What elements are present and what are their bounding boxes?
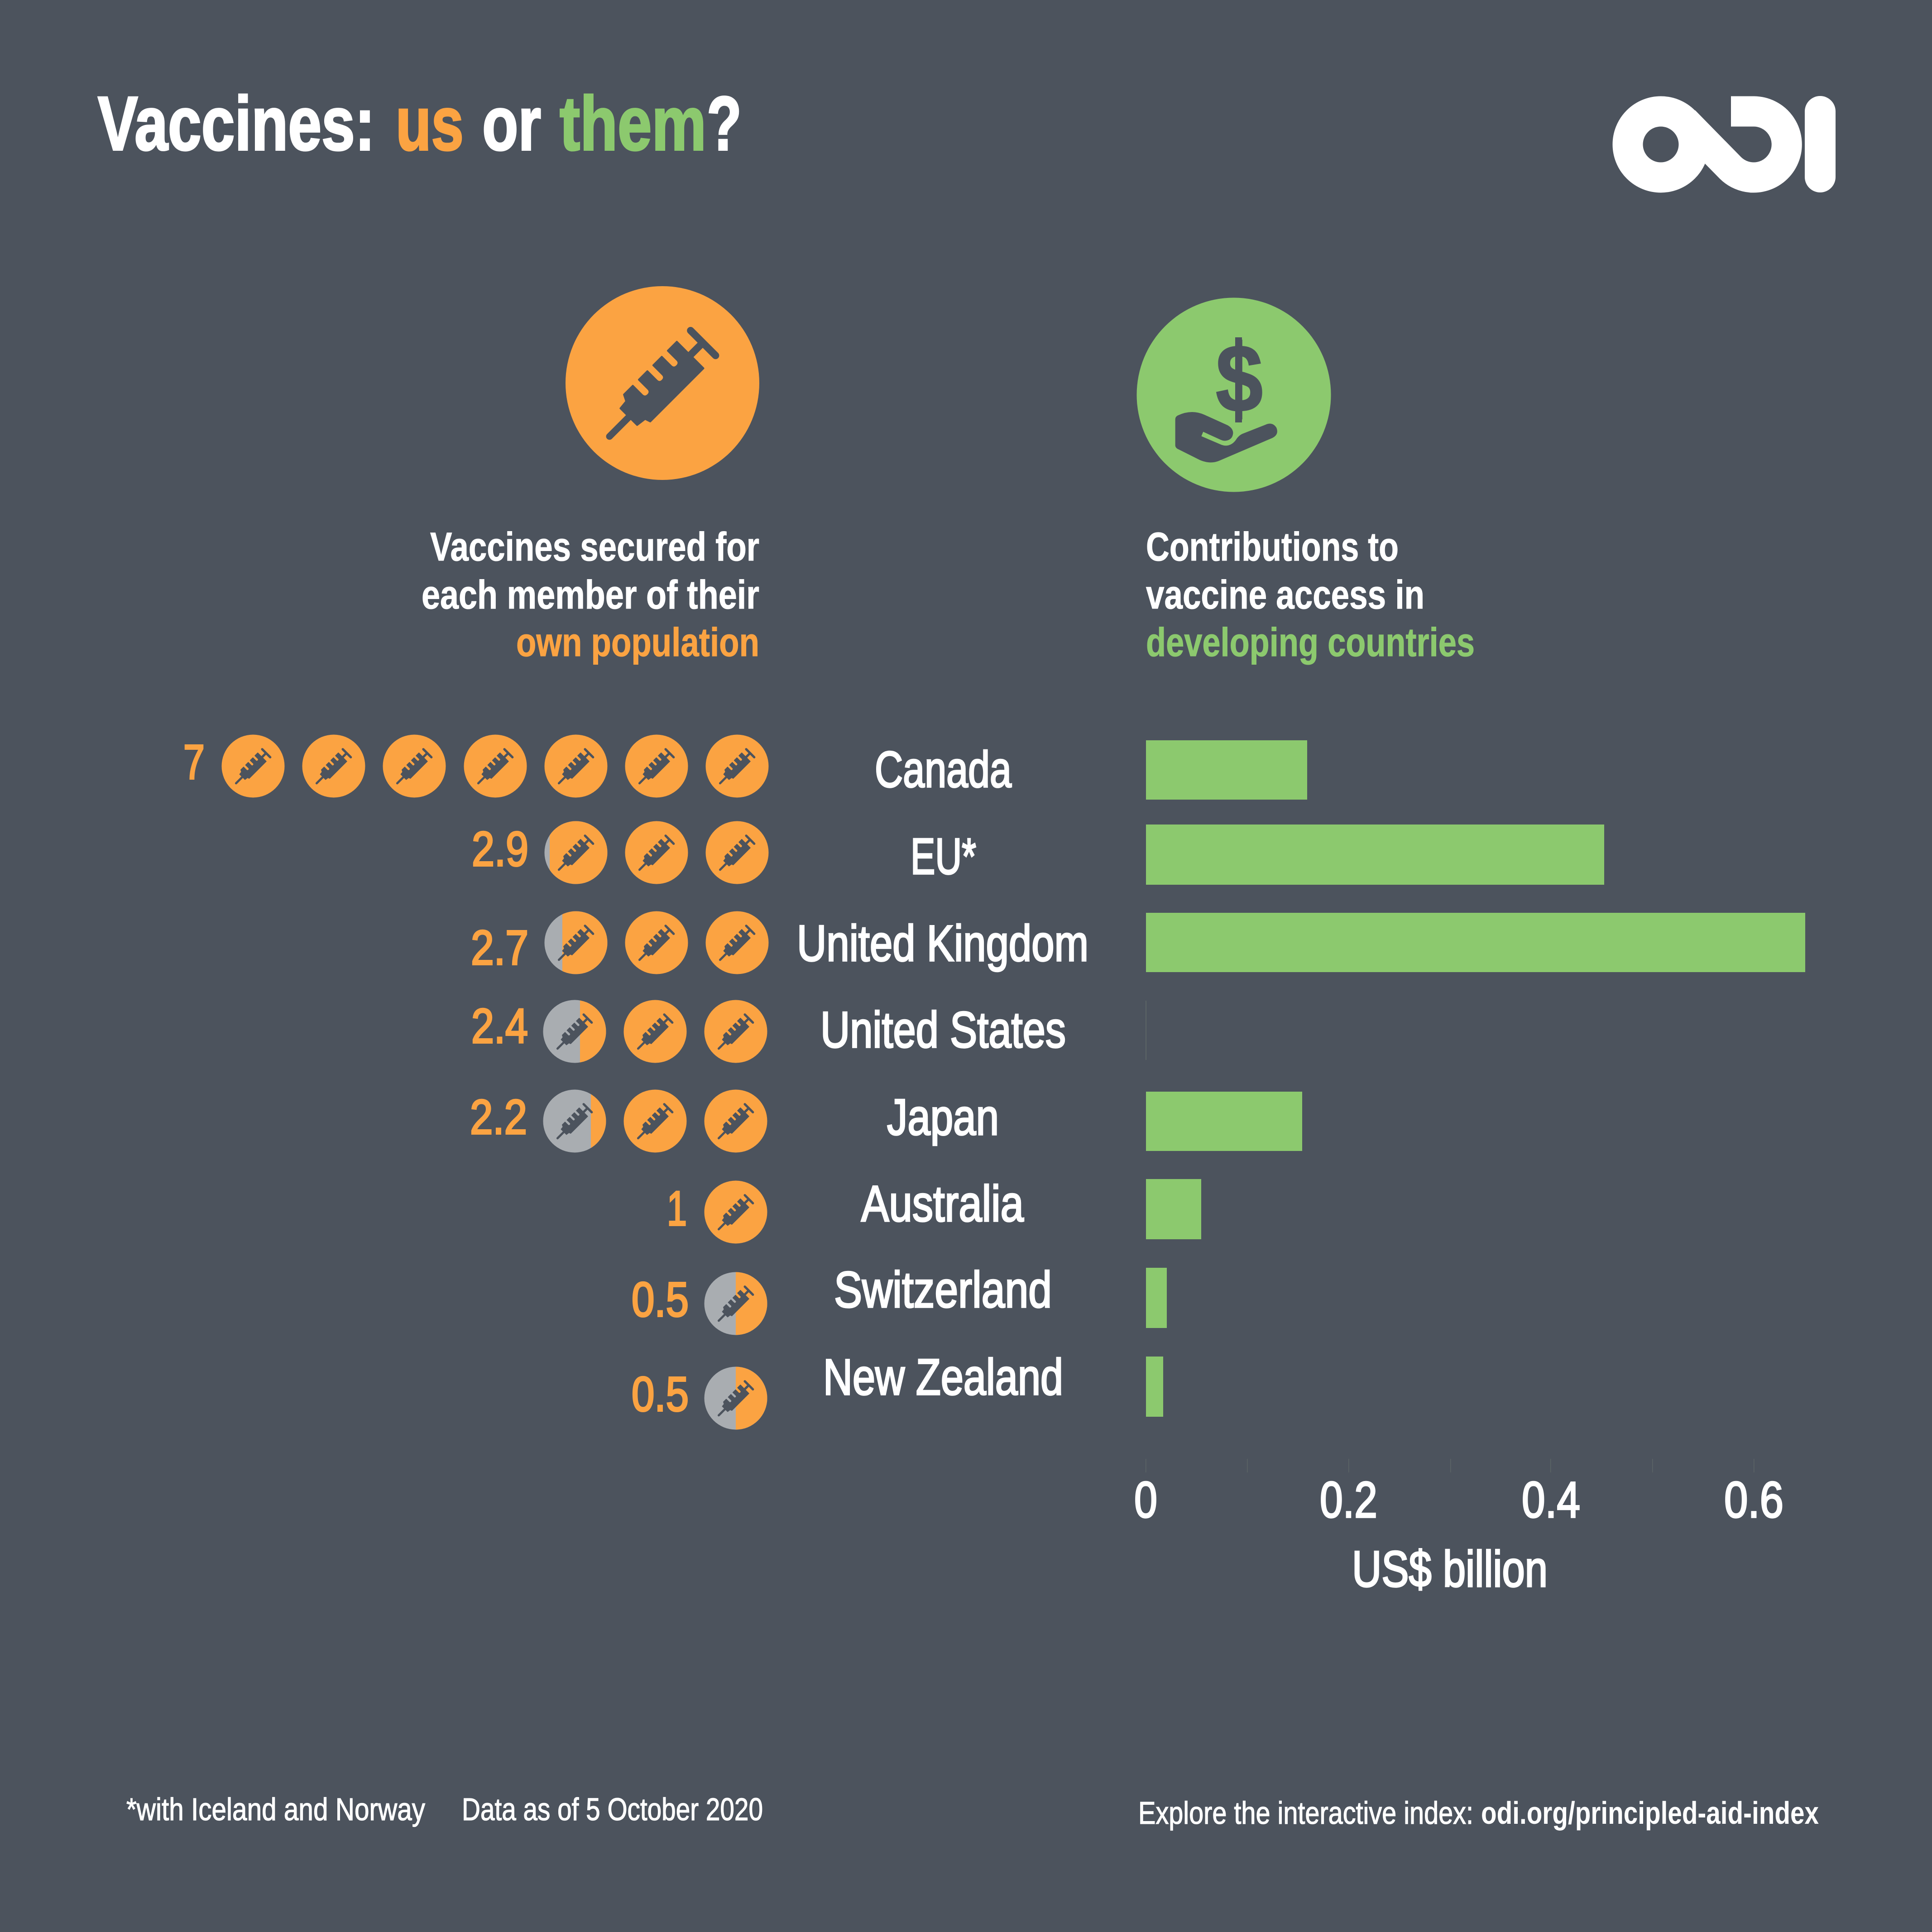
heading: vaccines secured: Vaccines secured for (430, 524, 759, 569)
footnote: *with Iceland and Norway (126, 1792, 425, 1827)
link text: Explore the interactive index: (1138, 1795, 1473, 1831)
heading: contributions: Contributions to (1146, 524, 1399, 569)
bar chart (1146, 740, 1805, 1417)
axis title: US$ billion (1352, 1541, 1548, 1597)
country labels: Switzerland (834, 1261, 1052, 1318)
row: New Zealand pictogram: 0.5 (632, 1366, 689, 1421)
heading: contributions (1146, 524, 1475, 665)
axis labels: 0.4 (1522, 1472, 1580, 1528)
title: us (396, 81, 464, 166)
row: United States pictogram: 2.4 (471, 998, 528, 1053)
heading: contributions: developing countries (1146, 619, 1475, 665)
logo: ODI (1628, 96, 1836, 192)
row: New Zealand pictogram (632, 1366, 767, 1430)
row: Australia pictogram (667, 1181, 767, 1243)
icon: large syringe (566, 286, 759, 480)
title (98, 81, 742, 166)
country labels: Australia (861, 1175, 1024, 1232)
heading: contributions: vaccine access in (1146, 572, 1424, 617)
icon: hand with dollar: $ (1216, 325, 1263, 432)
title: Vaccines: (98, 81, 375, 166)
heading: vaccines secured: own population (516, 619, 759, 665)
axis labels (1134, 1472, 1783, 1528)
title: them (560, 81, 706, 166)
link text (1138, 1795, 1819, 1831)
country labels: Japan (887, 1089, 999, 1146)
axis labels: 0.6 (1724, 1472, 1783, 1528)
row: United States pictogram (471, 998, 767, 1063)
row: United Kingdom pictogram: 2.7 (471, 920, 528, 975)
row: Switzerland pictogram: 0.5 (632, 1272, 689, 1327)
heading: vaccines secured (422, 524, 759, 665)
row: Japan pictogram: 2.2 (470, 1089, 527, 1144)
row: United Kingdom pictogram (471, 911, 769, 975)
link text: odi.org/principled-aid-index (1481, 1795, 1819, 1831)
footnote: Data as of 5 October 2020 (462, 1792, 763, 1827)
title: or (482, 81, 541, 166)
heading: vaccines secured: each member of their (422, 572, 759, 617)
axis labels: 0.2 (1320, 1472, 1377, 1528)
country labels: United States (820, 1002, 1066, 1058)
country labels (797, 741, 1088, 1405)
row: Japan pictogram (470, 1089, 767, 1153)
row: Canada pictogram: 7 (183, 734, 205, 789)
country labels: EU* (911, 828, 976, 885)
country labels: United Kingdom (797, 915, 1088, 972)
row: Australia pictogram: 1 (667, 1181, 687, 1236)
icon: hand with dollar (1136, 298, 1331, 492)
row: EU pictogram (472, 821, 769, 884)
axis ticks (1146, 1459, 1754, 1472)
footnote (126, 1792, 763, 1827)
row: Canada pictogram (183, 734, 769, 798)
country labels: New Zealand (823, 1349, 1063, 1405)
country labels: Canada (875, 741, 1012, 798)
row: Switzerland pictogram (632, 1272, 767, 1335)
axis labels: 0 (1134, 1472, 1157, 1528)
row: EU pictogram: 2.9 (472, 821, 528, 876)
title: ? (707, 81, 742, 166)
